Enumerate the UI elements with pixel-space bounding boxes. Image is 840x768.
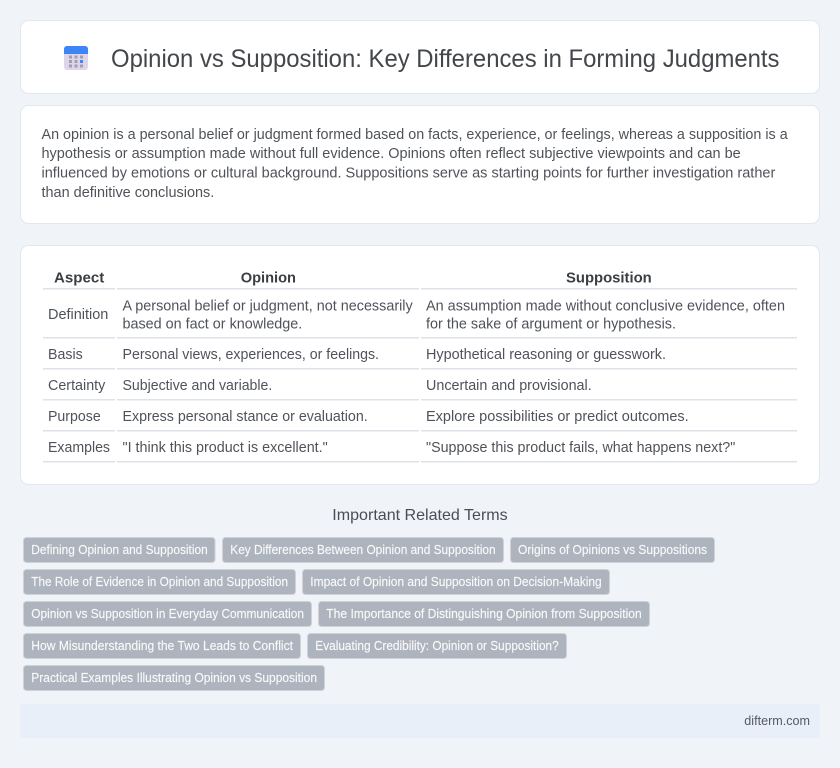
footer text: source: difterm.com <box>744 713 810 728</box>
table row: purpose: Purpose <box>48 409 101 425</box>
table header row: Opinion <box>241 270 296 286</box>
text block: introduction: than definitive conclusions. <box>42 185 214 201</box>
tag: Defining Opinion and Supposition <box>31 542 208 557</box>
panel: comparison table <box>20 246 820 484</box>
table row: definition: Definition <box>48 307 108 323</box>
tag <box>222 538 504 562</box>
heading: important related terms: Important Related Terms <box>332 507 508 524</box>
table row: basis: Personal views, experiences, or feelings. <box>122 347 379 363</box>
tag <box>24 538 215 562</box>
tag <box>24 570 296 594</box>
table header row <box>43 270 797 290</box>
tag: Impact of Opinion and Supposition on Decision-Making <box>310 574 602 589</box>
table row: basis: Basis <box>48 347 83 363</box>
tag: Practical Examples Illustrating Opinion vs Supposition <box>31 670 317 685</box>
tag <box>308 634 566 658</box>
table row: purpose: Explore possibilities or predict outcomes. <box>426 409 689 425</box>
tag: Origins of Opinions vs Suppositions <box>518 542 707 557</box>
panel: related term tags <box>24 538 714 690</box>
table row: basis <box>43 347 797 370</box>
table row: purpose <box>43 409 797 432</box>
table row: definition: based on fact or knowledge. <box>122 316 302 332</box>
table row: certainty: Certainty <box>48 378 106 394</box>
tag: Opinion vs Supposition in Everyday Communication <box>31 606 304 621</box>
table row: definition: A personal belief or judgment, not necessarily <box>122 298 413 314</box>
tag <box>24 666 324 690</box>
table row: certainty: Subjective and variable. <box>122 378 272 394</box>
table row: examples: "Suppose this product fails, what happens next?" <box>426 440 735 456</box>
tag: Evaluating Credibility: Opinion or Supposition? <box>315 638 559 653</box>
table row: certainty: Uncertain and provisional. <box>426 378 592 394</box>
table row: examples <box>43 440 797 462</box>
title: Opinion vs Supposition: Key Differences in Forming Judgments <box>111 45 780 73</box>
tag: The Importance of Distinguishing Opinion from Supposition <box>326 606 642 621</box>
text block: introduction: influenced by emotions or cultural background. Suppositions serve as starting points for further investigation rather <box>42 166 776 182</box>
tag <box>24 602 312 626</box>
text block: introduction: hypothesis or assumption made without full evidence. Opinions often reflect subjective viewpoints and can be <box>42 146 741 162</box>
tag <box>24 634 300 658</box>
panel: header <box>20 20 820 94</box>
table row: examples: "I think this product is excellent." <box>122 440 328 456</box>
tag: Key Differences Between Opinion and Supposition <box>230 542 496 557</box>
table row: definition: for the sake of argument or hypothesis. <box>426 316 676 332</box>
tag <box>510 538 714 562</box>
table row: certainty <box>43 378 797 400</box>
tag: The Role of Evidence in Opinion and Supposition <box>31 574 288 589</box>
tag <box>318 602 650 626</box>
panel: introduction <box>20 106 820 224</box>
tag <box>302 570 610 594</box>
footer <box>20 704 820 738</box>
table row: definition: An assumption made without conclusive evidence, often <box>426 298 785 314</box>
table row: examples: Examples <box>48 440 110 456</box>
table header row: Supposition <box>566 270 652 286</box>
icon: calendar <box>64 46 88 70</box>
text block: introduction: An opinion is a personal belief or judgment formed based on facts, experience, or feelings, whereas a supposition is a <box>42 127 788 143</box>
text block: introduction <box>42 127 788 201</box>
table header row: Aspect <box>54 270 104 286</box>
tag: How Misunderstanding the Two Leads to Conflict <box>31 638 293 653</box>
table row: purpose: Express personal stance or evaluation. <box>122 409 368 425</box>
table row: definition <box>43 298 797 338</box>
table row: basis: Hypothetical reasoning or guesswork. <box>426 347 666 363</box>
